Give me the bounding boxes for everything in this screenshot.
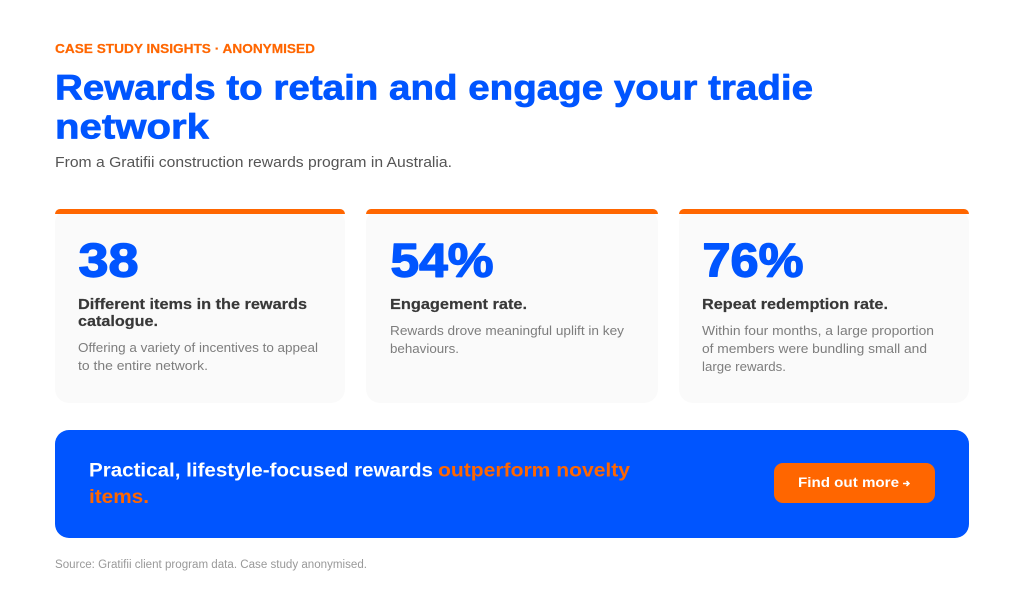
card heading: catalogue. xyxy=(78,314,158,330)
button: find out more: Find out more xyxy=(798,475,900,490)
card description xyxy=(702,323,934,374)
card heading: Different items in the rewards xyxy=(78,297,307,313)
panel: stat card 38 xyxy=(55,209,345,403)
banner message: items. xyxy=(89,487,149,508)
banner message xyxy=(89,460,630,508)
title xyxy=(55,68,813,146)
card heading: Repeat redemption rate. xyxy=(702,297,888,313)
title: Rewards to retain and engage your tradie xyxy=(55,68,813,108)
card heading xyxy=(78,297,307,330)
card description: Offering a variety of incentives to appeal xyxy=(78,340,318,355)
card description xyxy=(390,323,625,356)
card description xyxy=(78,340,318,373)
card description: large rewards. xyxy=(702,359,786,374)
stat number 38: 38 xyxy=(78,234,138,286)
banner message: outperform novelty xyxy=(438,460,630,482)
card description: of members were bundling small and xyxy=(702,341,927,356)
source note: Source: Gratifii client program data. Case study anonymised. xyxy=(55,559,367,571)
card description: Rewards drove meaningful uplift in key xyxy=(390,323,625,338)
icon: arrow xyxy=(903,481,909,486)
card description: to the entire network. xyxy=(78,358,208,373)
card description: Within four months, a large proportion xyxy=(702,323,934,338)
subtitle: From a Gratifii construction rewards program in Australia. xyxy=(55,155,452,171)
stat number 54%: 54% xyxy=(390,234,494,286)
panel: call to action banner xyxy=(55,430,969,538)
title: network xyxy=(55,108,210,146)
banner message: Practical, lifestyle-focused rewards xyxy=(89,460,433,482)
card description: behaviours. xyxy=(390,341,459,356)
card heading: Engagement rate. xyxy=(390,297,527,313)
panel: stat card 76% xyxy=(679,209,969,403)
eyebrow label: CASE STUDY INSIGHTS · ANONYMISED xyxy=(55,42,315,56)
button: find out more xyxy=(774,463,935,503)
stat number 76%: 76% xyxy=(702,234,804,286)
panel: stat card 54% xyxy=(366,209,658,403)
